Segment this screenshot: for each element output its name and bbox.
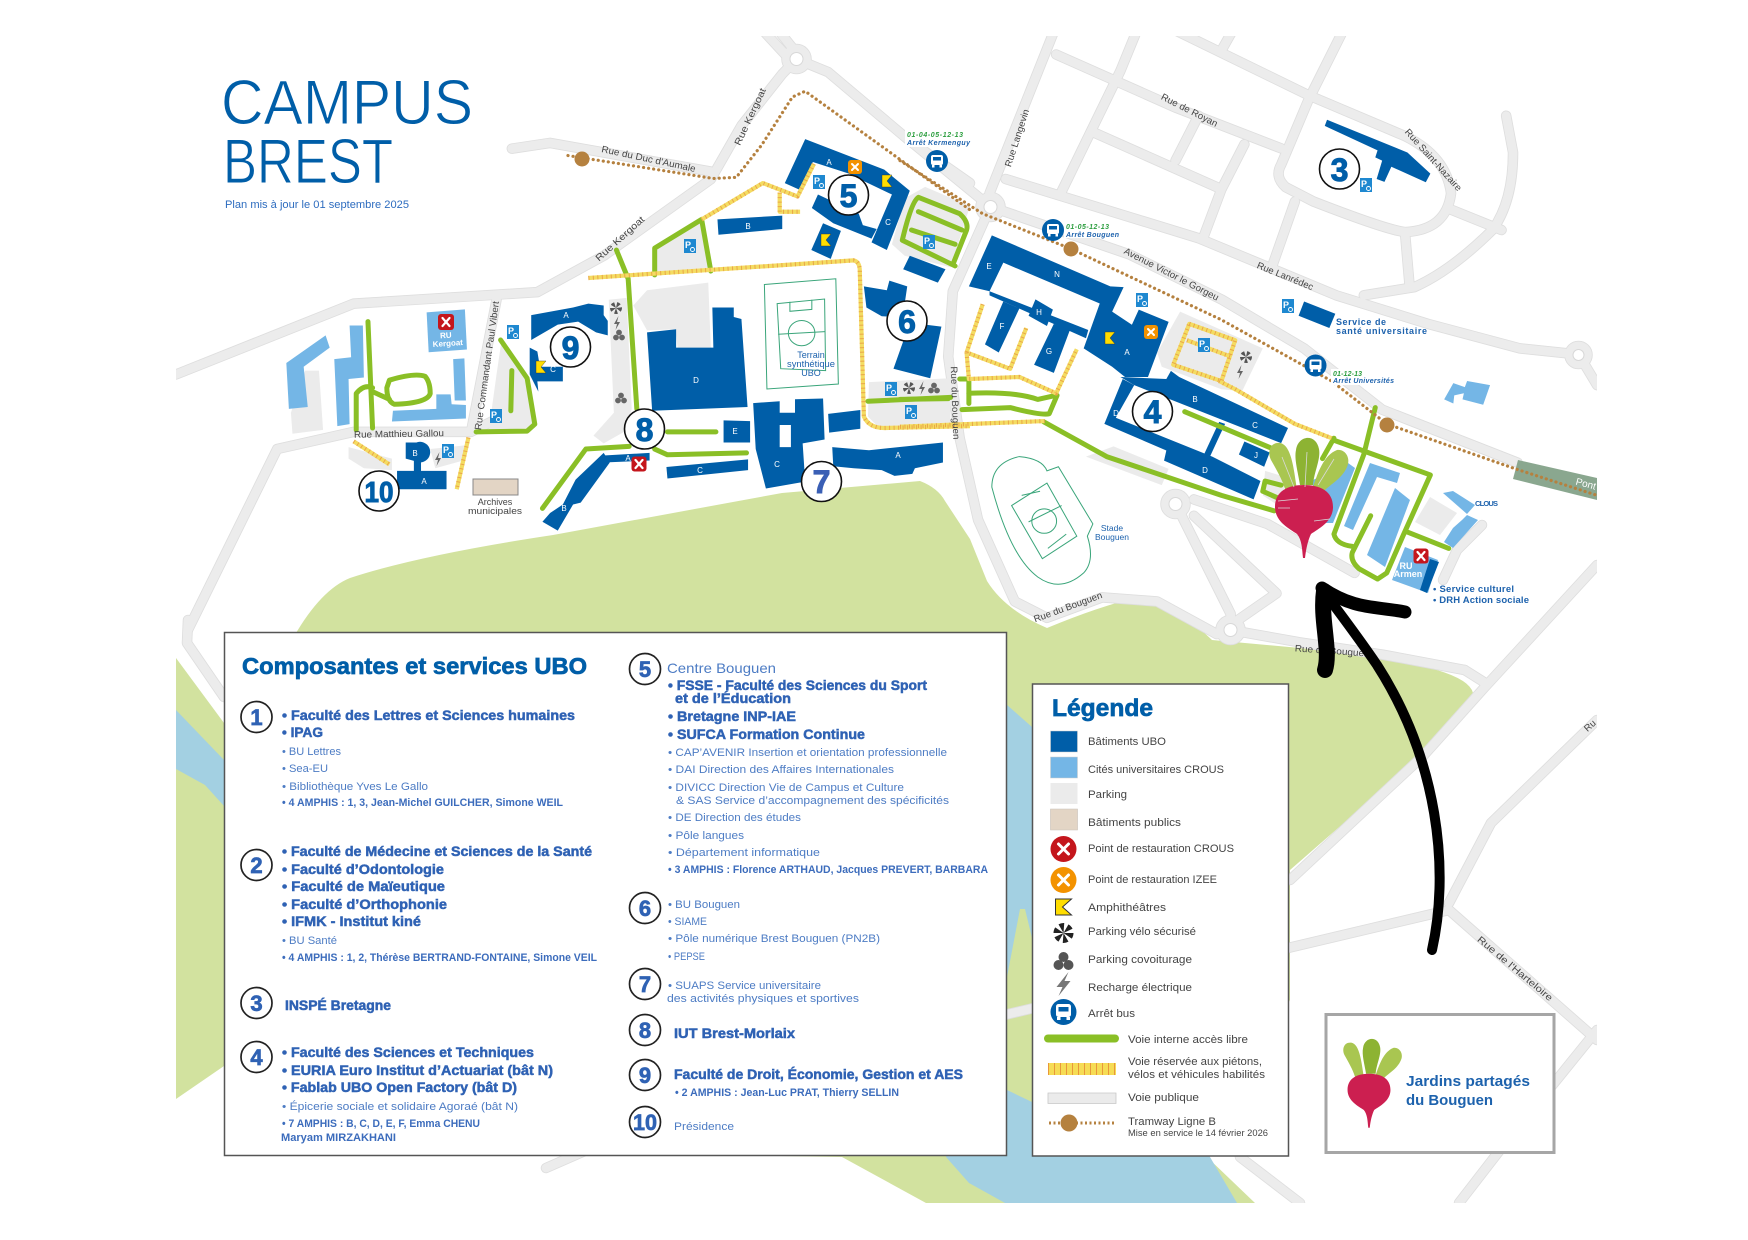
street names: Rue du Bouguen xyxy=(948,366,961,440)
right column entries: & SAS Service d’accompagnement des spécificités xyxy=(676,795,950,807)
legend labels: Bâtiments publics xyxy=(1088,817,1182,829)
parking icons: P xyxy=(1283,300,1289,310)
bus stops: Arrêt Bouguen xyxy=(1065,232,1119,239)
bus stops: 01-04-05-12-13 xyxy=(907,132,963,139)
street names: Rue du Bouguen xyxy=(1294,643,1370,660)
number digits: 5 xyxy=(639,657,651,682)
left column entries: • Faculté des Sciences et Techniques xyxy=(282,1044,534,1060)
street names xyxy=(354,86,1599,1004)
parking icons: P xyxy=(443,445,449,455)
parking icons xyxy=(442,175,1372,458)
parking icons: P xyxy=(906,406,912,416)
parkings xyxy=(291,187,1457,535)
street names: Rue Matthieu Gallou xyxy=(354,428,444,441)
building letters: A xyxy=(563,311,569,320)
site labels: Terrain xyxy=(797,350,825,360)
building letters: D xyxy=(693,376,699,385)
parking icons: P xyxy=(1137,294,1143,304)
number digits: 6 xyxy=(639,896,651,921)
right column entries: • SUFCA Formation Continue xyxy=(668,726,865,742)
public roads xyxy=(176,26,1597,1203)
campus number markers: 5 xyxy=(840,178,857,214)
street names: Pont xyxy=(1574,477,1597,493)
callout text: du Bouguen xyxy=(1406,1092,1493,1109)
title: Plan mis à jour le 01 septembre 2025 xyxy=(225,199,409,211)
left column entries: • Faculté des Lettres et Sciences humaines xyxy=(282,707,575,723)
parking icons: P xyxy=(1361,179,1367,189)
legend labels: Voie réservée aux piétons, xyxy=(1128,1056,1262,1068)
water zones xyxy=(176,690,1237,1203)
left column entries: • Faculté d’Orthophonie xyxy=(282,896,447,912)
right column entries: • PEPSE xyxy=(668,951,705,963)
building letters: F xyxy=(1000,322,1005,331)
panel: legend xyxy=(1032,684,1288,1156)
parking icons: P xyxy=(508,326,514,336)
site labels: Archives xyxy=(478,497,513,507)
right column entries: • DE Direction des études xyxy=(668,812,802,824)
site labels: municipales xyxy=(468,506,523,516)
right column entries: • CAP’AVENIR Insertion et orientation professionnelle xyxy=(668,747,947,759)
bus stops: Arrêt Kermenguy xyxy=(906,140,971,147)
bus stops: 01-05-12-13 xyxy=(1066,224,1109,231)
legend labels: Arrêt bus xyxy=(1088,1008,1136,1020)
building letters: A xyxy=(1124,348,1130,357)
right column entries: des activités physiques et sportives xyxy=(667,993,860,1005)
map area xyxy=(176,26,1599,1203)
site labels: • Service culturel xyxy=(1433,584,1514,595)
parking icons: P xyxy=(1199,339,1205,349)
icon: small radish xyxy=(1343,1039,1402,1128)
right column entries: • SUAPS Service universitaire xyxy=(668,980,821,992)
right column entries: • Bretagne INP-IAE xyxy=(668,708,796,724)
callout text xyxy=(1406,1073,1530,1109)
sports fields xyxy=(764,279,1093,584)
number digits: 1 xyxy=(250,705,263,730)
left column entries: • Bibliothèque Yves Le Gallo xyxy=(282,781,428,793)
site labels: UBO xyxy=(801,368,821,378)
campus number markers xyxy=(359,149,1360,511)
building letters: D xyxy=(1202,466,1208,475)
number digits: 2 xyxy=(250,853,263,878)
left column entries: • Faculté de Médecine et Sciences de la Santé xyxy=(282,843,592,859)
right column entries: IUT Brest-Morlaix xyxy=(674,1025,795,1041)
right column entries: • BU Bouguen xyxy=(668,899,740,911)
right column entries: • DAI Direction des Affaires Internationales xyxy=(668,764,895,776)
site labels: Armen xyxy=(1394,569,1422,579)
street names: Rue Kergoat xyxy=(594,214,647,264)
campus number markers: 3 xyxy=(1331,152,1348,188)
green park zones xyxy=(176,481,1473,1203)
legend labels: Mise en service le 14 février 2026 xyxy=(1128,1128,1268,1138)
building letters: C xyxy=(885,218,891,227)
left column entries: • 7 AMPHIS : B, C, D, E, F, Emma CHENU xyxy=(282,1118,480,1130)
title xyxy=(221,68,473,211)
site labels: Service de xyxy=(1336,317,1386,327)
street names: Rue Langevin xyxy=(1003,108,1032,168)
legend labels: Parking vélo sécurisé xyxy=(1088,926,1196,938)
street names: Avenue Victor le Gorgeu xyxy=(1122,246,1220,304)
site labels: CLOUS xyxy=(1475,499,1498,508)
parking icons: P xyxy=(886,383,892,393)
number markers xyxy=(241,654,660,1138)
arrow to the Jardins xyxy=(1322,588,1440,950)
bus stops: 01-12-13 xyxy=(1333,371,1362,378)
bridge xyxy=(1513,460,1597,500)
left column entries: • IPAG xyxy=(282,724,323,740)
right column entries: Faculté de Droit, Économie, Gestion et AES xyxy=(674,1066,963,1082)
right column entries: • 2 AMPHIS : Jean-Luc PRAT, Thierry SELLIN xyxy=(675,1087,899,1099)
legend labels: Voie interne accès libre xyxy=(1128,1034,1248,1046)
left column entries: • 4 AMPHIS : 1, 2, Thérèse BERTRAND-FONTAINE, Simone VEIL xyxy=(282,952,597,964)
building letters: D xyxy=(1113,409,1119,418)
number digits xyxy=(250,657,657,1135)
legend labels: Point de restauration IZEE xyxy=(1088,874,1217,886)
parking icons: P xyxy=(924,236,930,246)
building letters: C xyxy=(1252,421,1258,430)
public building: archives xyxy=(473,479,518,495)
panel: components and services xyxy=(224,632,1006,1156)
number digits: 4 xyxy=(250,1045,263,1070)
title: CAMPUS xyxy=(221,68,473,138)
number digits: 10 xyxy=(633,1110,657,1135)
legend labels: Parking xyxy=(1088,789,1127,801)
left column entries: • BU Santé xyxy=(282,935,337,947)
building letters: H xyxy=(1036,308,1042,317)
site labels: Kergoat xyxy=(432,338,464,349)
right column entries: • 3 AMPHIS : Florence ARTHAUD, Jacques PREVERT, BARBARA xyxy=(668,864,988,876)
right column entries: • Département informatique xyxy=(668,847,820,859)
right column entries: • FSSE - Faculté des Sciences du Sport xyxy=(668,677,927,693)
legend labels: Point de restauration CROUS xyxy=(1088,843,1234,855)
building letters xyxy=(412,158,1258,513)
bus stops xyxy=(905,130,1396,385)
legend labels: Tramway Ligne B xyxy=(1128,1116,1216,1128)
left column entries: • 4 AMPHIS : 1, 3, Jean-Michel GUILCHER, Simone WEIL xyxy=(282,797,563,809)
street names: Ru xyxy=(1582,718,1599,734)
tramway line xyxy=(568,91,1597,495)
number digits: 8 xyxy=(639,1018,651,1043)
building letters: B xyxy=(412,449,418,458)
left column entries: • BU Lettres xyxy=(282,746,341,758)
building letters: A xyxy=(421,477,427,486)
legend labels: Cités universitaires CROUS xyxy=(1088,764,1224,776)
left column entries: Maryam MIRZAKHANI xyxy=(281,1132,396,1144)
building letters: C xyxy=(550,365,556,374)
legend labels: vélos et véhicules habilités xyxy=(1128,1069,1266,1081)
left column entries: • Faculté de Maïeutique xyxy=(282,878,445,894)
campus number markers: 4 xyxy=(1144,394,1162,430)
street names: Rue de Royan xyxy=(1159,92,1219,130)
building letters: B xyxy=(1192,395,1198,404)
icon: large radish xyxy=(1269,438,1348,558)
site labels: RU xyxy=(1400,561,1412,571)
site labels: santé universitaire xyxy=(1336,326,1427,336)
legend icons xyxy=(1044,836,1119,1132)
building letters: E xyxy=(732,427,738,436)
right column entries: • Pôle numérique Brest Bouguen (PN2B) xyxy=(668,933,880,945)
legend swatches xyxy=(1050,731,1078,830)
legend heading: Légende xyxy=(1052,695,1153,722)
street names: Rue Lanrédec xyxy=(1255,260,1315,293)
right column entries: Présidence xyxy=(674,1121,734,1133)
building letters: B xyxy=(561,504,567,513)
internal green roads xyxy=(356,197,1449,579)
left column entries: • IFMK - Institut kiné xyxy=(282,913,421,929)
panel heading: Composantes et services UBO xyxy=(242,653,587,679)
street names: Rue du Duc d'Aumale xyxy=(600,144,697,175)
left column entries: • Faculté d’Odontologie xyxy=(282,861,444,877)
site labels: Stade xyxy=(1101,523,1123,533)
building letters: N xyxy=(1054,270,1060,279)
parking icons: P xyxy=(685,240,691,250)
right column entries: • SIAME xyxy=(668,916,707,928)
left column entries: INSPÉ Bretagne xyxy=(285,998,392,1013)
parking icons: P xyxy=(814,176,820,186)
building letters: C xyxy=(774,460,780,469)
street names: Rue Kergoat xyxy=(733,86,769,147)
restaurant icons xyxy=(438,160,1428,564)
building letters: C xyxy=(697,466,703,475)
title: BREST xyxy=(223,127,393,197)
street names: Rue Saint-Nazaire xyxy=(1402,127,1464,194)
bike, charging and carpool icons xyxy=(435,305,1249,466)
building letters: B xyxy=(745,222,751,231)
legend labels: Amphithéâtres xyxy=(1088,902,1167,914)
number digits: 3 xyxy=(250,991,263,1016)
site labels xyxy=(432,317,1529,606)
campus number markers: 9 xyxy=(562,330,579,366)
building letters: E xyxy=(986,262,992,271)
building letters: A xyxy=(895,451,901,460)
left column entries: • EURIA Euro Institut d’Actuariat (bât N) xyxy=(282,1062,553,1078)
right column entries: Centre Bouguen xyxy=(667,660,776,676)
right column entries: et de l’Éducation xyxy=(675,690,791,706)
callout: Jardins partagés xyxy=(1326,1014,1554,1152)
number digits: 9 xyxy=(639,1063,651,1088)
legend labels: Parking covoiturage xyxy=(1088,954,1192,966)
left column entries: • Fablab UBO Open Factory (bât D) xyxy=(282,1079,517,1095)
legend labels: Bâtiments UBO xyxy=(1088,736,1166,748)
legend labels: Recharge électrique xyxy=(1088,982,1192,994)
right column entries xyxy=(667,660,988,1133)
campus number markers: 6 xyxy=(898,304,916,340)
number digits: 7 xyxy=(639,972,651,997)
legend labels xyxy=(1088,736,1268,1138)
UBO buildings xyxy=(397,120,1439,593)
site labels: • DRH Action sociale xyxy=(1433,595,1529,606)
street names: Rue du Bouguen xyxy=(1032,590,1104,625)
street names: Rue de l'Harteloire xyxy=(1475,934,1555,1004)
CROUS residences xyxy=(286,309,1490,593)
campus number markers: 10 xyxy=(364,477,394,509)
building letters: A xyxy=(826,158,832,167)
street names: Rue Commandant Paul Vibert xyxy=(473,300,502,431)
parking icons: P xyxy=(491,410,497,420)
right column entries: • Pôle langues xyxy=(668,830,745,842)
campus number markers: 8 xyxy=(636,412,653,448)
left column entries xyxy=(281,707,597,1144)
site labels: synthétique xyxy=(787,359,835,369)
site labels: RU xyxy=(440,331,452,340)
campus number markers: 7 xyxy=(813,464,830,500)
callout text: Jardins partagés xyxy=(1406,1073,1530,1090)
left column entries: • Sea-EU xyxy=(282,763,328,775)
roundabouts xyxy=(790,52,1584,636)
site labels: Bouguen xyxy=(1095,532,1129,542)
bus stops: Arrêt Universités xyxy=(1332,378,1394,385)
amphitheatre icons xyxy=(536,175,1115,373)
building letters: J xyxy=(1254,451,1258,460)
legend labels: Voie publique xyxy=(1128,1092,1199,1104)
right column entries: • DIVICC Direction Vie de Campus et Culture xyxy=(668,782,904,794)
left column entries: • Épicerie sociale et solidaire Agoraé (bât N) xyxy=(282,1100,518,1113)
building letters: G xyxy=(1046,347,1052,356)
pedestrian yellow roads xyxy=(354,164,1332,489)
building letters: A xyxy=(625,454,631,463)
